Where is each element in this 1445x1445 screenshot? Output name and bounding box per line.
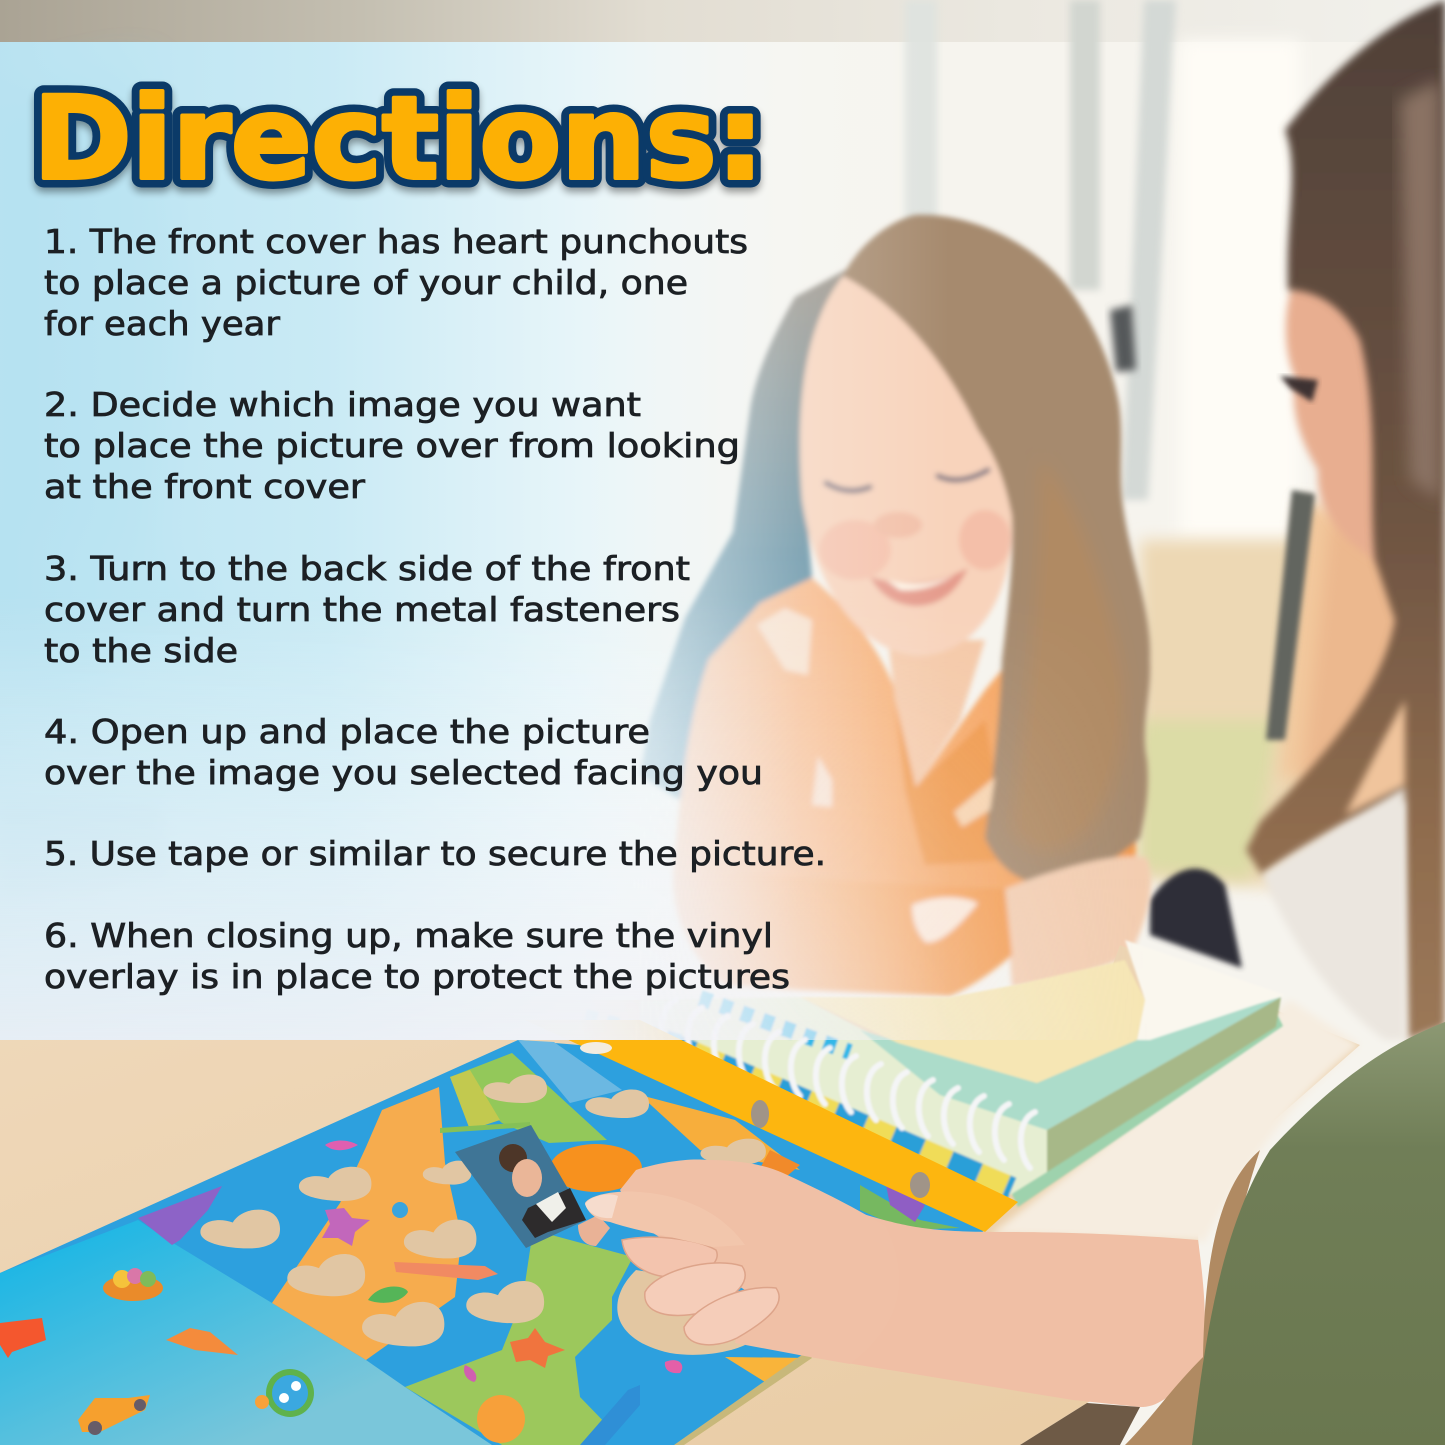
icon: flower basket bbox=[103, 1268, 163, 1301]
green shirt bbox=[1192, 1022, 1445, 1445]
school photo bbox=[455, 1125, 586, 1248]
shirt heart prints bbox=[912, 897, 978, 942]
pale yellow page bbox=[800, 960, 1145, 1083]
purple corner bbox=[138, 1186, 222, 1245]
woman's eye bbox=[1280, 376, 1318, 402]
white top bbox=[1262, 787, 1405, 1040]
orange band bbox=[272, 1087, 460, 1360]
step 4 text bbox=[44, 712, 763, 792]
orange block bbox=[758, 1150, 800, 1182]
blue and yellow tabs bbox=[664, 1040, 1012, 1188]
step 2 text: at the front cover bbox=[44, 467, 365, 506]
green band upper bbox=[450, 1053, 607, 1143]
girl hair, left side bbox=[640, 262, 860, 800]
step 5 text: 5. Use tape or similar to secure the picture. bbox=[44, 834, 826, 873]
woman with long hair, green shirt bbox=[1020, 0, 1445, 1445]
open book cover bbox=[0, 1040, 985, 1445]
decorative stars and shapes bbox=[322, 1208, 370, 1246]
girl shirt bbox=[673, 578, 1136, 996]
yellow-green sliver bbox=[450, 1070, 500, 1130]
middle finger bbox=[622, 1237, 717, 1277]
little finger bbox=[684, 1288, 779, 1345]
step 6 text: overlay is in place to protect the pictures bbox=[44, 957, 790, 996]
woman's face bbox=[1286, 250, 1420, 565]
girl eyes bbox=[826, 470, 988, 491]
step 4 text: over the image you selected facing you bbox=[44, 753, 763, 792]
girl with long hair and orange shirt bbox=[640, 215, 1151, 996]
ring finger bbox=[645, 1263, 745, 1315]
thumb bbox=[585, 1192, 745, 1247]
hearts bbox=[200, 1074, 766, 1346]
light blue top wedge bbox=[518, 1040, 622, 1103]
back of hand and palm bbox=[620, 1159, 899, 1364]
photo background bbox=[455, 1125, 586, 1248]
peach skin below hair strand bbox=[1345, 700, 1405, 815]
bright right table area bbox=[990, 1000, 1360, 1242]
yellow lower corner bbox=[725, 1357, 810, 1382]
small finger behind photo bbox=[578, 1215, 610, 1246]
shirt shaded V area bbox=[895, 700, 1010, 865]
rivets bbox=[751, 1100, 769, 1128]
warm lock of hair bbox=[1010, 460, 1126, 852]
girl sleeve bbox=[673, 863, 1012, 996]
step 6 text bbox=[44, 916, 790, 996]
orange right band bbox=[640, 1095, 800, 1170]
step 6 text: 6. When closing up, make sure the vinyl bbox=[44, 916, 773, 955]
step 2 text: to place the picture over from looking bbox=[44, 426, 740, 465]
directions panel overlay bbox=[0, 42, 1150, 1040]
step 2 text: 2. Decide which image you want bbox=[44, 385, 641, 424]
purple and green corner near strip bbox=[860, 1185, 960, 1230]
boy face bbox=[512, 1159, 542, 1197]
table edge and dark support bbox=[1020, 1403, 1140, 1445]
cyan strip above bbox=[585, 998, 850, 1052]
hair highlight streak bbox=[1400, 80, 1440, 500]
cover base bbox=[0, 1040, 985, 1445]
woman's neck bbox=[1300, 520, 1420, 800]
icon: alarm clock bbox=[255, 1369, 314, 1417]
thumb nail bbox=[585, 1194, 618, 1218]
hand holding photo bbox=[578, 1159, 899, 1364]
girl smile bbox=[870, 568, 968, 606]
step 3 text: cover and turn the metal fasteners bbox=[44, 590, 680, 629]
step 3 text: 3. Turn to the back side of the front bbox=[44, 549, 690, 588]
step 3 text: to the side bbox=[44, 631, 238, 670]
large circular punchout bbox=[617, 1270, 745, 1355]
heading: Directions: Directions: bbox=[33, 77, 764, 210]
heading: Directions: Directions: bbox=[33, 72, 764, 205]
step 1 text bbox=[44, 222, 748, 343]
orange spine strip bbox=[525, 1020, 1018, 1232]
girl nose bbox=[874, 512, 922, 538]
spiral binding bbox=[662, 1000, 1035, 1168]
woman's arm bbox=[810, 1210, 1205, 1407]
icon: toy car bbox=[78, 1395, 150, 1432]
green band lower bbox=[405, 1230, 633, 1445]
step 1 text: 1. The front cover has heart punchouts bbox=[44, 222, 748, 261]
step 3 text bbox=[44, 549, 690, 670]
cover edge bbox=[674, 1352, 812, 1445]
white page top bbox=[1125, 940, 1285, 1040]
table top bbox=[0, 945, 1360, 1445]
green pencil bbox=[440, 1122, 530, 1133]
orange sticker behind photo bbox=[550, 1144, 642, 1192]
step 4 text: 4. Open up and place the picture bbox=[44, 712, 650, 751]
page stack end with stripes bbox=[640, 997, 1047, 1195]
girl neck bbox=[888, 640, 985, 787]
girl face bbox=[800, 276, 1012, 656]
green back cover bbox=[1010, 1000, 1283, 1207]
left blue panel bbox=[0, 1220, 492, 1445]
heading: Directions: Directions: bbox=[33, 72, 764, 205]
icon: kite bbox=[0, 1318, 46, 1358]
boy hair bbox=[499, 1144, 527, 1172]
woman's hair bbox=[1246, 0, 1445, 1040]
step 1 text: to place a picture of your child, one bbox=[44, 263, 688, 302]
activity book back pages bbox=[585, 940, 1285, 1207]
icon: ice cream bbox=[166, 1328, 238, 1355]
page block edge bbox=[1047, 997, 1281, 1172]
step 1 text: for each year bbox=[44, 304, 280, 343]
girl hand bbox=[1005, 856, 1151, 987]
step 2 text bbox=[44, 385, 740, 506]
girl hair, top and right side bbox=[843, 215, 1150, 884]
boy vest bbox=[522, 1188, 586, 1238]
hair behind shoulder bbox=[1125, 1150, 1260, 1445]
mint page bbox=[860, 997, 1281, 1130]
